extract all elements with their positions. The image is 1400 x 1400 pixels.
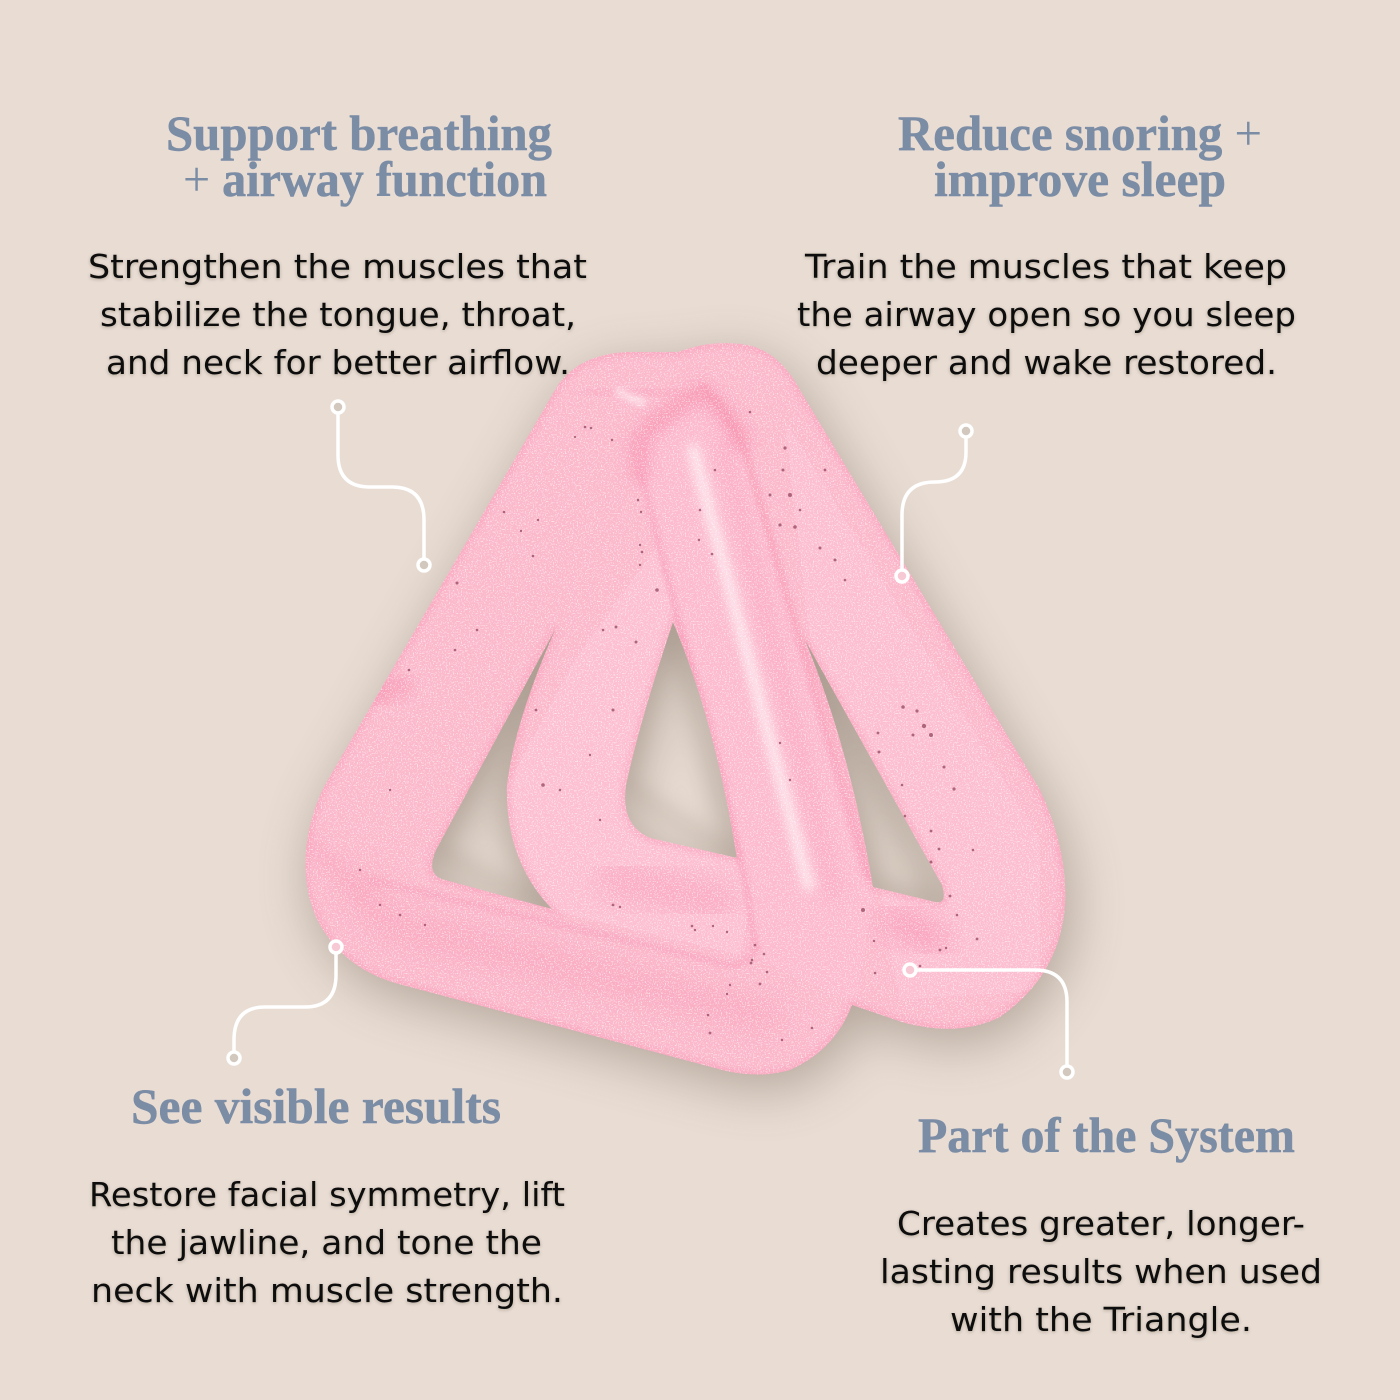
bottom arm edge: [370, 880, 757, 965]
text block: reduce snoring: deeper and wake restored.: [816, 343, 1277, 382]
text block: part of the system: with the Triangle.: [950, 1300, 1252, 1339]
surface shading: [300, 335, 1080, 1085]
product image: pink interlocked triangles: [300, 335, 1080, 1089]
front arm of the front triangle: [780, 919, 855, 951]
text block: see visible results: the jawline, and tone the: [111, 1223, 542, 1262]
connector: top right: [896, 425, 972, 582]
connector: bottom right: [904, 964, 1073, 1078]
heading: support breathing: + airway function: [183, 151, 547, 207]
text block: support breathing: and neck for better airflow.: [106, 343, 570, 382]
dark speckles: [359, 411, 978, 1041]
outer rim: [305, 343, 1065, 1075]
pink body silhouette: [305, 343, 1065, 1075]
connector: top left: [332, 401, 430, 571]
heading: see visible results: See visible results: [131, 1078, 501, 1134]
text block: reduce snoring: the airway open so you sleep: [797, 295, 1296, 334]
heading: support breathing: Support breathing: [166, 105, 552, 161]
glitter texture: [300, 335, 1080, 1085]
text block: part of the system: lasting results when used: [880, 1252, 1322, 1291]
heading: reduce snoring: Reduce snoring +: [898, 105, 1262, 161]
heading: support breathing: [166, 105, 552, 207]
text block: see visible results: Restore facial symmetry, lift: [89, 1175, 565, 1214]
text block: support breathing: stabilize the tongue, throat,: [100, 295, 576, 334]
heading: reduce snoring: improve sleep: [934, 151, 1226, 207]
text block: support breathing: Strengthen the muscles that: [88, 247, 587, 286]
text block: reduce snoring: Train the muscles that keep: [804, 247, 1287, 286]
text block: reduce snoring: [797, 247, 1296, 382]
heading: reduce snoring: [898, 105, 1262, 207]
text block: part of the system: Creates greater, longer-: [897, 1204, 1305, 1243]
heading: part of the system: Part of the System: [918, 1107, 1295, 1163]
cast shadow: [311, 357, 1071, 1089]
text block: part of the system: [880, 1204, 1322, 1339]
text block: support breathing: [88, 247, 587, 382]
text block: see visible results: [89, 1175, 565, 1310]
text block: see visible results: neck with muscle strength.: [91, 1271, 563, 1310]
inner hole shading: [436, 622, 935, 909]
connector: bottom left: [228, 941, 342, 1064]
